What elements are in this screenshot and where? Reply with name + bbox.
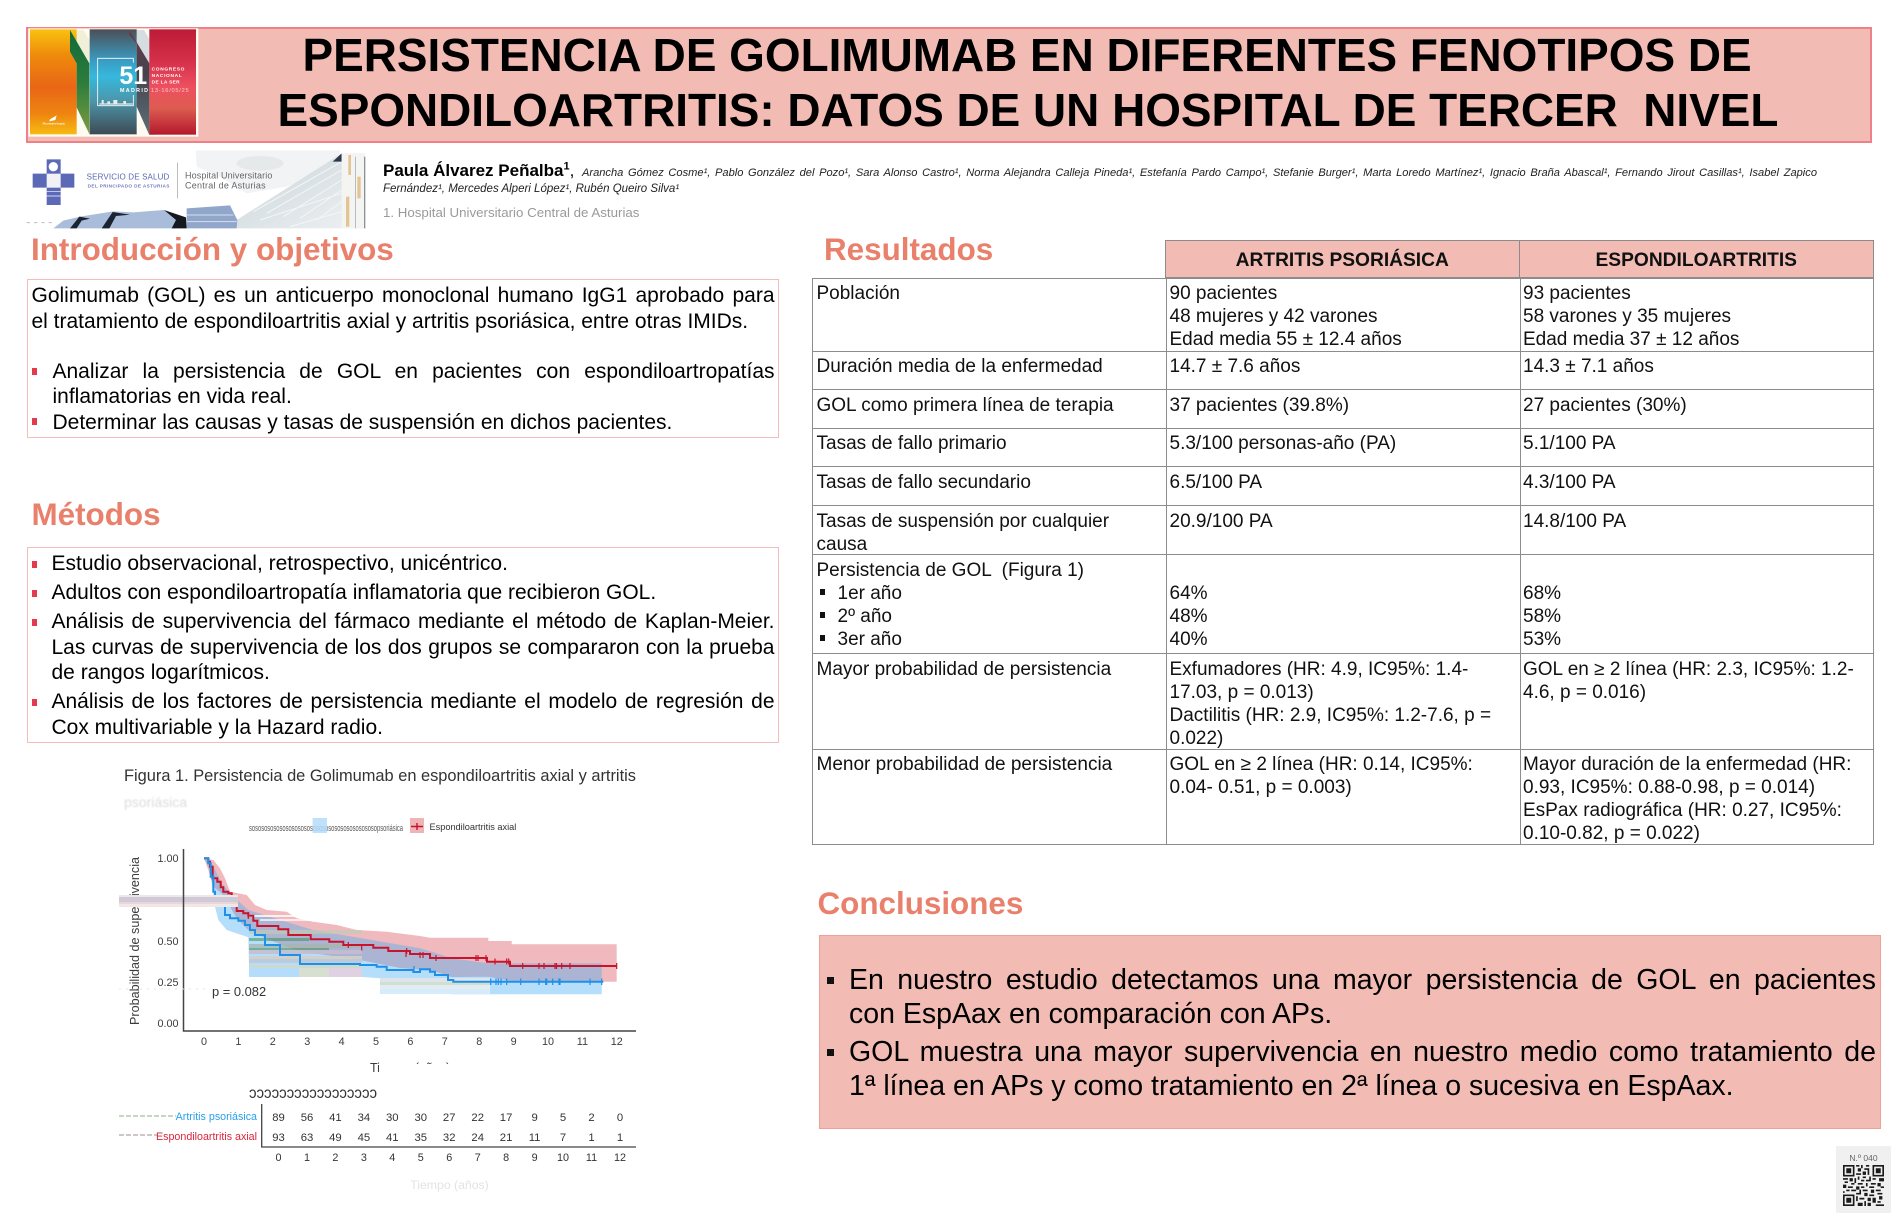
hospital logo banner: Central de Asturias	[185, 180, 266, 190]
panel: introducción: el tratamiento de espondiloartritis axial y artritis psoriásica, entre otras IMIDs.	[32, 310, 748, 333]
risk table: 89	[272, 1112, 285, 1124]
row: fallo primario: Tasas de fallo primario	[816, 433, 1007, 454]
row: menor probabilidad: EsPax radiográfica (HR: 0.27, IC95%:	[1523, 800, 1842, 821]
row: persistencia: 1er año	[838, 583, 902, 604]
row: menor probabilidad: GOL en ≥ 2 línea (HR: 0.14, IC95%:	[1170, 754, 1473, 775]
risk table: Tiempo (años)	[410, 1178, 489, 1192]
x axis labels: 8	[476, 1036, 482, 1048]
row: persistencia	[812, 555, 1874, 654]
table header: artritis psoriásica: ARTRITIS PSORIÁSICA	[1236, 250, 1449, 271]
panel: introducción	[26, 279, 778, 438]
panel: introducción: inflamatorias en vida real.	[52, 385, 292, 408]
y axis: Probabilidad de supervivencia	[128, 857, 142, 1025]
table header: espondiloartritis: ESPONDILOARTRITIS	[1596, 250, 1797, 271]
row: población: Edad media 55 ± 12.4 años	[1170, 329, 1402, 350]
row: persistencia: 68%	[1523, 583, 1561, 604]
row: suspensión: Tasas de suspensión por cualquier	[816, 511, 1109, 532]
title text: ESPONDILOARTRITIS: DATOS DE UN HOSPITAL DE TERCER NIVEL	[278, 84, 1778, 136]
risk table: 11	[529, 1132, 540, 1144]
hospital logo banner: Hospital Universitario	[185, 170, 272, 180]
row: persistencia: 2º año	[838, 606, 892, 627]
panel: introducción: Golimumab (GOL) es un anticuerpo monoclonal humano IgG1 aprobado para	[32, 284, 774, 307]
risk table: 0	[275, 1152, 282, 1164]
QR code	[1843, 1165, 1884, 1206]
x axis labels: 7	[442, 1036, 448, 1048]
legend: sososososososososososososososososososososopsoriásica	[249, 823, 404, 833]
risk table: 10	[557, 1152, 569, 1164]
title text: PERSISTENCIA DE GOLIMUMAB EN DIFERENTES FENOTIPOS DE	[302, 29, 1752, 81]
x axis labels: 11	[577, 1036, 588, 1048]
risk table: 27	[443, 1112, 455, 1124]
congress logo: CONGRESO	[152, 66, 185, 72]
risk table: 7	[560, 1132, 566, 1144]
panel: métodos	[26, 547, 778, 743]
hospital logo banner: SERVICIO DE SALUD	[87, 172, 170, 181]
row: persistencia: 64%	[1170, 583, 1208, 604]
risk table: 2	[588, 1112, 595, 1124]
risk table: 0	[617, 1112, 623, 1124]
panel: métodos: Las curvas de supervivencia de los dos grupos se compararon con la prueba	[52, 636, 774, 659]
row: población: 90 pacientes	[1170, 283, 1277, 304]
confidence bands	[204, 858, 617, 994]
risk table: ɔɔɔɔɔɔɔɔɔɔɔɔɔɔɔɔɔ	[249, 1085, 377, 1102]
panel: introducción: Determinar las causas y tasas de suspensión en dichos pacientes.	[52, 411, 672, 434]
row: suspensión	[812, 506, 1874, 555]
axes	[184, 849, 636, 1031]
curve: espondiloartritis axial	[204, 858, 617, 969]
heading: conclusiones: Conclusiones	[818, 886, 1023, 921]
row: persistencia: 48%	[1170, 606, 1208, 627]
p value: p = 0.082	[212, 984, 266, 999]
risk table: 9	[531, 1112, 538, 1124]
row: menor probabilidad: 0.04- 0.51, p = 0.003)	[1170, 777, 1352, 798]
congress logo: Reumatología	[43, 122, 65, 126]
row: población	[812, 278, 1874, 352]
row: suspensión: causa	[816, 534, 867, 555]
risk table: 12	[614, 1152, 626, 1164]
congress logo: MADRID	[120, 88, 148, 94]
risk table: 30	[386, 1112, 399, 1124]
row: población: 93 pacientes	[1523, 283, 1631, 304]
risk table: 24	[471, 1132, 484, 1144]
risk table: 41	[329, 1112, 342, 1124]
row: duración	[812, 352, 1874, 390]
row: mayor probabilidad: 17.03, p = 0.013)	[1170, 682, 1314, 703]
title banner	[26, 27, 1872, 143]
row: mayor probabilidad: 0.022)	[1170, 728, 1223, 749]
risk table: 21	[500, 1132, 512, 1144]
y axis: 0.25	[157, 977, 178, 989]
risk table: 3	[361, 1152, 367, 1164]
legend: Espondiloartritis axial	[430, 822, 516, 832]
figure caption: Figura 1. Persistencia de Golimumab en espondiloartritis axial y artritis	[124, 767, 636, 785]
x axis labels: 12	[611, 1036, 623, 1048]
risk table: 1	[617, 1132, 623, 1144]
legend	[249, 818, 516, 833]
risk table: 49	[329, 1132, 342, 1144]
authors: Paula Álvarez Peñalba1,	[383, 160, 574, 180]
figure caption: psoriásica	[124, 794, 187, 810]
risk table: 63	[301, 1132, 313, 1144]
row: fallo primario: 5.3/100 personas-año (PA)	[1170, 433, 1396, 454]
risk table: 32	[443, 1132, 455, 1144]
row: primera línea: 27 pacientes (30%)	[1523, 395, 1687, 416]
row: menor probabilidad: 0.93, IC95%: 0.88-0.98, p = 0.014)	[1523, 777, 1815, 798]
panel: conclusiones: 1ª línea en APs y como tratamiento en 2ª línea o sucesiva en EspAax.	[849, 1070, 1734, 1102]
authors: 1. Hospital Universitario Central de Asturias	[383, 205, 639, 220]
row: mayor probabilidad: Exfumadores (HR: 4.9, IC95%: 1.4-	[1170, 659, 1468, 680]
row: menor probabilidad: Mayor duración de la enfermedad (HR:	[1523, 754, 1851, 775]
row: población: 48 mujeres y 42 varones	[1170, 306, 1378, 327]
x axis labels: Tiempo (años)	[370, 1061, 450, 1075]
row: duración: 14.3 ± 7.1 años	[1523, 356, 1654, 377]
y axis: 0.50	[157, 936, 178, 948]
y axis	[128, 853, 178, 1030]
row: fallo secundario: 4.3/100 PA	[1523, 472, 1616, 493]
row: menor probabilidad	[812, 750, 1874, 845]
row: persistencia: 53%	[1523, 629, 1561, 650]
authors: Fernández¹, Mercedes Alperi López¹, Rubén Queiro Silva¹	[383, 183, 679, 195]
y axis: 0.75	[157, 894, 178, 906]
figure caption	[124, 767, 636, 810]
panel: métodos: Estudio observacional, retrospectivo, unicéntrico.	[52, 552, 508, 575]
risk table: 9	[532, 1152, 538, 1164]
risk table: 2	[332, 1152, 338, 1164]
results table	[812, 240, 1874, 845]
risk table: 8	[503, 1152, 509, 1164]
x axis labels: 6	[407, 1036, 413, 1048]
row: mayor probabilidad: Dactilitis (HR: 2.9, IC95%: 1.2-7.6, p =	[1170, 705, 1491, 726]
y axis: 0.00	[157, 1018, 178, 1030]
row: mayor probabilidad: 4.6, p = 0.016)	[1523, 682, 1646, 703]
title text	[278, 29, 1778, 136]
risk table: 4	[389, 1152, 395, 1164]
panel: métodos: Análisis de supervivencia del fármaco mediante el método de Kaplan-Meier.	[52, 610, 774, 633]
x axis labels: 10	[542, 1036, 554, 1048]
row: mayor probabilidad	[812, 654, 1874, 750]
x axis labels: 1	[235, 1036, 241, 1048]
row: persistencia: 3er año	[838, 629, 902, 650]
risk table: 35	[415, 1132, 427, 1144]
congress logo: 51	[119, 62, 147, 90]
x axis labels: 3	[304, 1036, 310, 1048]
risk table: 22	[471, 1112, 484, 1124]
risk table: 34	[358, 1112, 370, 1124]
panel: conclusiones: con EspAax en comparación con APs.	[849, 998, 1332, 1030]
panel: métodos: Análisis de los factores de persistencia mediante el modelo de regresión de	[52, 690, 774, 713]
authors	[383, 160, 1817, 220]
hospital logo banner	[26, 150, 366, 228]
QR code badge	[1836, 1146, 1891, 1213]
row: fallo secundario: 6.5/100 PA	[1170, 472, 1262, 493]
row: persistencia: 40%	[1170, 629, 1208, 650]
row: persistencia: 58%	[1523, 606, 1561, 627]
panel: conclusiones: GOL muestra una mayor supervivencia en nuestro medio como tratamiento de	[849, 1036, 1876, 1068]
x axis labels: 9	[511, 1036, 517, 1048]
table header: artritis psoriásica	[1165, 240, 1520, 278]
congress logo: NACIONAL	[152, 73, 182, 79]
risk table: 17	[500, 1112, 512, 1124]
risk table: 1	[304, 1152, 310, 1164]
x axis labels: 5	[373, 1036, 379, 1048]
row: mayor probabilidad: Mayor probabilidad de persistencia	[816, 659, 1111, 680]
risk table: 7	[475, 1152, 481, 1164]
compression artefacts over chart	[249, 915, 490, 994]
row: población: 58 varones y 35 mujeres	[1523, 306, 1731, 327]
row: suspensión: 14.8/100 PA	[1523, 511, 1626, 532]
poster number: N.º 040	[1849, 1153, 1878, 1163]
panel: conclusiones: En nuestro estudio detectamos una mayor persistencia de GOL en pacientes	[849, 964, 1876, 996]
risk table: 5	[418, 1152, 424, 1164]
heading: introducción y objetivos: Introducción y objetivos	[31, 232, 394, 267]
row: duración: Duración media de la enfermedad	[816, 356, 1103, 377]
panel: métodos: de rangos logarítmicos.	[52, 661, 270, 684]
row: fallo primario	[812, 429, 1874, 467]
curve: artritis psoriásica	[204, 858, 603, 985]
x axis labels: 0	[201, 1036, 207, 1048]
panel: introducción: Analizar la persistencia de GOL en pacientes con espondiloartropatías	[52, 360, 774, 383]
risk table: 30	[415, 1112, 427, 1124]
row: fallo secundario	[812, 467, 1874, 506]
authors: Arancha Gómez Cosme¹, Pablo González del Pozo¹, Sara Alonso Castro¹, Norma Alejandra Calleja Pineda¹, Estefanía Pardo Campo¹, Stefanie Burger¹, Marta Loredo Martínez¹, Ignacio Braña Abascal¹, Fernando Jirout Casillas¹, Isabel Zapico	[582, 167, 1817, 179]
row: menor probabilidad: Menor probabilidad de persistencia	[816, 754, 1112, 775]
risk table: 45	[358, 1132, 370, 1144]
heading: resultados: Resultados	[824, 232, 993, 267]
row: población: Población	[816, 283, 900, 304]
x axis labels: 2	[270, 1036, 276, 1048]
congress logo: 13-16/05/25	[151, 88, 189, 94]
risk table: 11	[586, 1152, 597, 1164]
risk table: 5	[560, 1112, 566, 1124]
hospital logo banner: DEL PRINCIPADO DE ASTURIAS	[88, 184, 169, 189]
panel: métodos: Cox multivariable y la Hazard radio.	[52, 716, 383, 739]
panel: métodos: Adultos con espondiloartropatía inflamatoria que recibieron GOL.	[52, 581, 656, 604]
artefact band over 0.75 tick	[119, 895, 238, 907]
row: persistencia: Persistencia de GOL (Figura 1)	[816, 560, 1084, 581]
row: población: Edad media 37 ± 12 años	[1523, 329, 1739, 350]
row: primera línea: GOL como primera línea de terapia	[816, 395, 1114, 416]
y axis: 1.00	[157, 853, 178, 865]
row: mayor probabilidad: GOL en ≥ 2 línea (HR: 2.3, IC95%: 1.2-	[1523, 659, 1854, 680]
row: suspensión: 20.9/100 PA	[1170, 511, 1273, 532]
row: fallo secundario: Tasas de fallo secundario	[816, 472, 1031, 493]
risk table: 41	[386, 1132, 399, 1144]
heading: métodos: Métodos	[32, 497, 161, 532]
x axis labels	[201, 1036, 623, 1075]
risk table: 1	[588, 1132, 595, 1144]
row: primera línea	[812, 390, 1874, 429]
congress logo: DE LA SER	[152, 80, 180, 86]
row: fallo primario: 5.1/100 PA	[1523, 433, 1616, 454]
risk table: 56	[301, 1112, 313, 1124]
risk table	[119, 1085, 636, 1192]
chart: Kaplan-Meier survival curves	[119, 818, 636, 1192]
row: primera línea: 37 pacientes (39.8%)	[1170, 395, 1349, 416]
panel: conclusiones	[819, 935, 1881, 1129]
table header: espondiloartritis	[1518, 240, 1874, 278]
x axis labels: 4	[339, 1036, 345, 1048]
congress logo	[28, 28, 198, 137]
risk table: Artritis psoriásica	[176, 1111, 257, 1123]
row: duración: 14.7 ± 7.6 años	[1170, 356, 1300, 377]
row: menor probabilidad: 0.10-0.82, p = 0.022)	[1523, 823, 1700, 844]
risk table: Espondiloartritis axial	[156, 1131, 257, 1143]
risk table: 93	[272, 1132, 285, 1144]
risk table: 6	[446, 1152, 452, 1164]
